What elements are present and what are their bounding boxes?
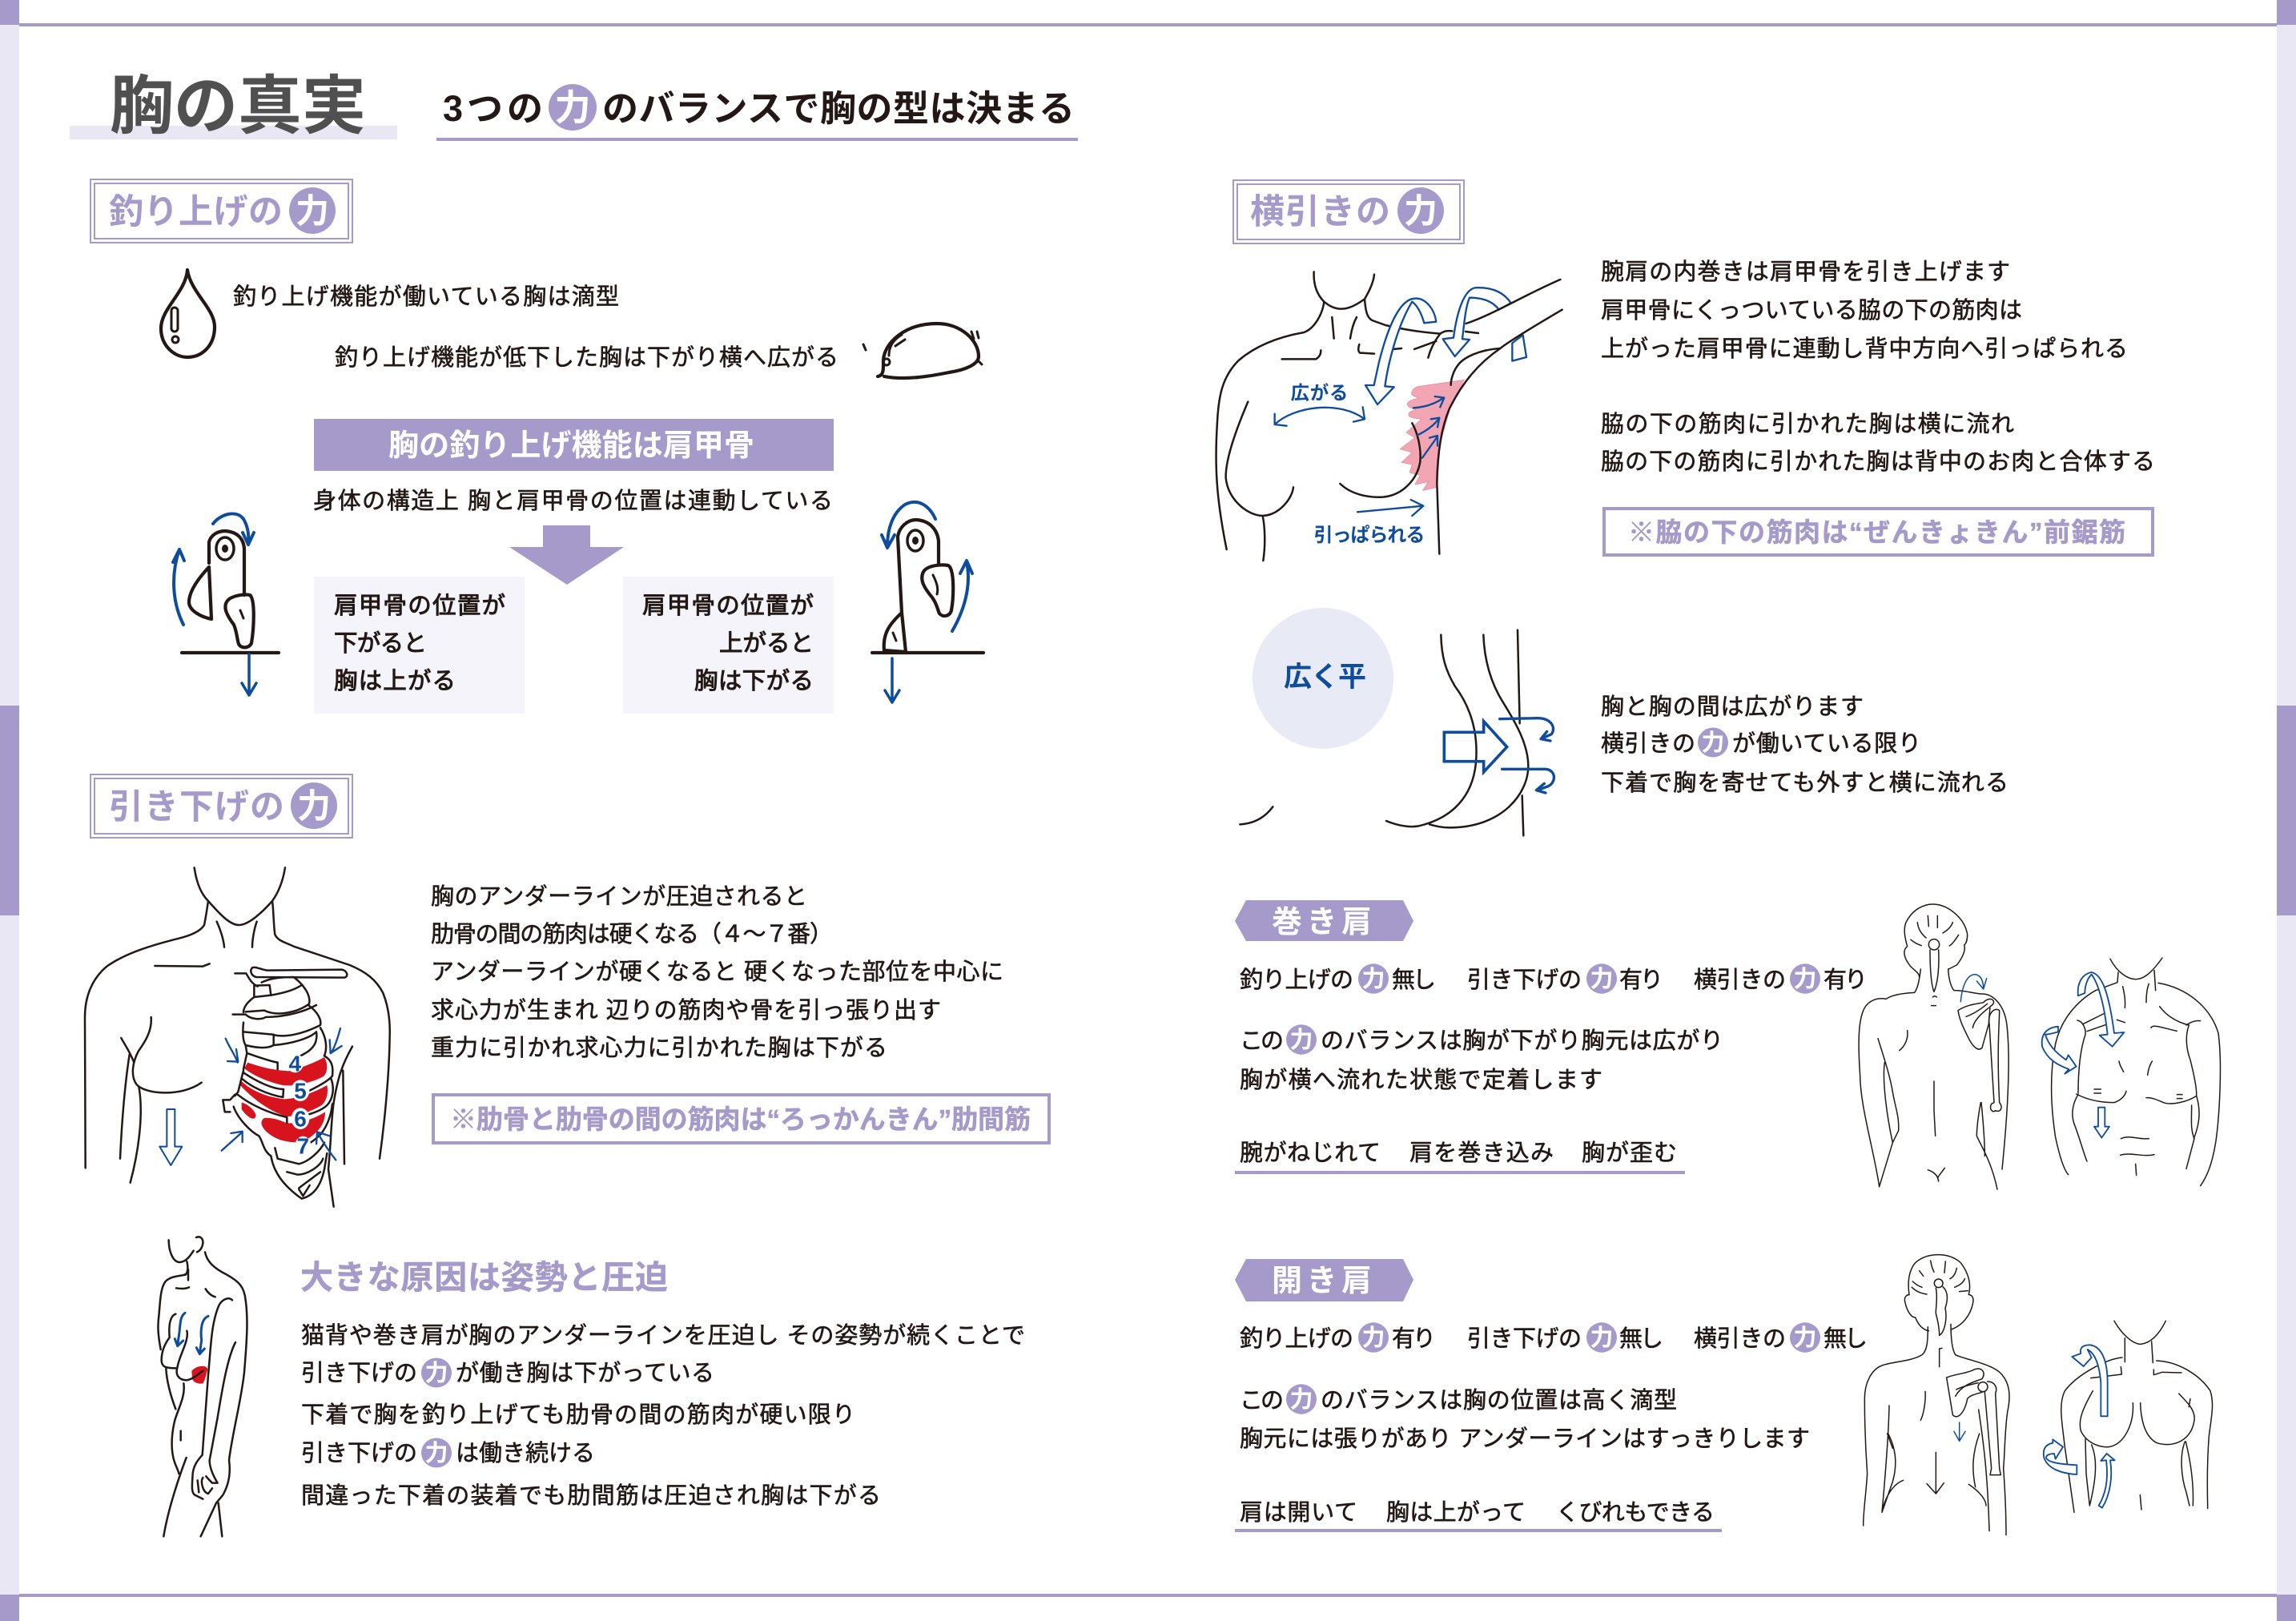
- text: shoulder rotation: 肩甲骨にくっついている脇の下の筋肉は: [1601, 297, 2022, 324]
- text: posture causes: が働き胸は下がっている: [456, 1360, 714, 1386]
- text: linked structure: 身体の構造上 胸と肩甲骨の位置は連動している: [313, 488, 833, 514]
- text: intercostal explanation: 求心力が生まれ 辺りの筋肉や骨を引っ張り出す: [431, 997, 941, 1024]
- badge: wide and flat: [1253, 608, 1393, 749]
- figure: chest with rib cage: 7: [297, 1134, 309, 1159]
- text: force balance: 力: [1361, 1325, 1385, 1351]
- subtitle: 力: [554, 87, 591, 128]
- text: lateral effect: 下着で胸を寄せても外すと横に流れる: [1601, 770, 2008, 796]
- text: shoulder rotation: 上がった肩甲骨に連動し背中方向へ引っぱられる: [1601, 336, 2128, 362]
- text: force balance: 横引きの: [1694, 967, 1786, 993]
- text: force balance: 力: [1590, 966, 1614, 992]
- text: effect: 力: [1289, 1027, 1313, 1053]
- text: lifting works: 釣り上げ機能が働いている胸は滴型: [233, 284, 619, 310]
- text: effect: 胸元には張りがあり アンダーラインはすっきりします: [1240, 1426, 1810, 1452]
- text: intercostal explanation: 胸のアンダーラインが圧迫されると: [431, 883, 807, 910]
- text: force balance: [1240, 963, 1868, 994]
- text: force balance: 釣り上げの: [1240, 1325, 1353, 1352]
- text: force balance: 有り: [1619, 967, 1663, 993]
- heading: pull-down force: 力: [297, 787, 331, 825]
- text: force balance: 引き下げの: [1467, 967, 1582, 993]
- text: summary with underline: [1235, 1499, 1722, 1532]
- text: force balance: [1240, 1322, 1868, 1353]
- text: force balance: 無し: [1619, 1325, 1663, 1352]
- text: effect: 力: [1289, 1386, 1313, 1413]
- figure: scapula raised: [872, 502, 983, 702]
- text: summary with underline: 胸が歪む: [1582, 1140, 1677, 1166]
- box: scapula down: 胸は上がる: [334, 668, 456, 694]
- text: force balance: 力: [1793, 1325, 1817, 1351]
- text: posture causes: 間違った下着の装着でも肋間筋は圧迫され胸は下がる: [301, 1482, 881, 1509]
- heading: main causes: 大きな原因は姿勢と圧迫: [300, 1259, 668, 1296]
- text: force balance: 力: [1590, 1325, 1614, 1351]
- text: posture causes: 猫背や巻き肩が胸のアンダーラインを圧迫し その姿勢が続くことで: [301, 1322, 1025, 1349]
- text: posture causes: 引き下げの: [301, 1361, 417, 1386]
- figure: chest with rib cage: 5: [294, 1078, 307, 1103]
- callout: intercostal note: [433, 1095, 1049, 1143]
- panel: open shoulders: [1235, 1255, 2213, 1535]
- text: shoulder rotation: [1601, 259, 2155, 475]
- text: effect: のバランスは胸が下がり胸元は広がり: [1321, 1028, 1723, 1054]
- text: posture causes: 力: [424, 1360, 448, 1386]
- text: force balance: 無し: [1824, 1325, 1868, 1352]
- text: effect: この: [1240, 1028, 1284, 1054]
- text: effect: この: [1240, 1388, 1284, 1414]
- badge: wide and flat: 広く平: [1284, 662, 1366, 693]
- figure: open shoulders front: [2044, 1321, 2213, 1512]
- heading: lateral force: [1233, 180, 1464, 243]
- text: posture causes: 下着で胸を釣り上げても肋骨の間の筋肉が硬い限り: [301, 1402, 855, 1428]
- text: force balance: 力: [1793, 966, 1817, 992]
- box: scapula down: 肩甲骨の位置が: [334, 593, 505, 619]
- box: scapula down: [314, 577, 525, 714]
- heading: pull-down force: [90, 774, 352, 838]
- heading: lifting force: [90, 179, 352, 243]
- text: lateral effect: [1601, 694, 2008, 796]
- heading: lifting force: 釣り上げの: [109, 193, 283, 231]
- text: force balance: 有り: [1824, 967, 1868, 993]
- text: summary with underline: くびれもできる: [1556, 1500, 1715, 1526]
- box: scapula up: 胸は下がる: [694, 668, 814, 694]
- page title: 胸の真実: [110, 70, 366, 142]
- figure: scapula lowered: [173, 513, 279, 695]
- figure: rolled shoulders front: [2042, 958, 2220, 1186]
- icon: flattened breast: [863, 324, 982, 378]
- figure: rolled shoulders back: [1859, 904, 2008, 1189]
- text: force balance: 引き下げの: [1467, 1326, 1582, 1352]
- text: intercostal explanation: [431, 883, 1003, 1061]
- text: force balance: 有り: [1392, 1325, 1436, 1352]
- figure: flowing breast: [1240, 630, 1554, 835]
- figure: chest with rib cage: [85, 867, 390, 1207]
- text: shoulder rotation: 腕肩の内巻きは肩甲骨を引き上げます: [1601, 259, 2010, 285]
- text: summary with underline: 肩は開いて: [1240, 1500, 1357, 1526]
- text: effect: のバランスは胸の位置は高く滴型: [1321, 1387, 1677, 1414]
- figure: open shoulders back: [1864, 1255, 2009, 1535]
- text: effect: [1240, 1384, 1810, 1452]
- text: intercostal explanation: 重力に引かれ求心力に引かれた胸は下がる: [431, 1035, 887, 1061]
- text: shoulder rotation: 脇の下の筋肉に引かれた胸は背中のお肉と合体する: [1601, 448, 2155, 475]
- box: scapula up: 肩甲骨の位置が: [642, 593, 814, 619]
- text: summary with underline: [1235, 1140, 1685, 1174]
- text: posture causes: 力: [424, 1440, 448, 1466]
- figure: serratus anterior: [1216, 272, 1562, 561]
- banner: scapula: 胸の釣り上げ機能は肩甲骨: [388, 429, 754, 463]
- figure: side body: [158, 1237, 247, 1536]
- label: open shoulders: 開き肩: [1272, 1265, 1372, 1298]
- label: rolled shoulders: [1235, 900, 1413, 941]
- text: lifting reduced: 釣り上げ機能が低下した胸は下がり横へ広がる: [335, 344, 838, 371]
- text: effect: 胸が横へ流れた状態で定着します: [1240, 1067, 1602, 1093]
- heading: lateral force: 横引きの: [1250, 193, 1390, 231]
- box: scapula up: 上がると: [719, 630, 814, 657]
- text: force balance: 無し: [1392, 967, 1436, 993]
- text: lateral effect: が働いている限り: [1732, 730, 1921, 757]
- box: scapula down: 下がると: [334, 630, 427, 657]
- callout: serratus note: ※脇の下の筋肉は“ぜんきょきん”前鋸筋: [1628, 517, 2125, 547]
- icon: teardrop breast: [161, 270, 215, 357]
- text: lateral effect: 横引きの: [1601, 730, 1695, 757]
- figure: serratus anterior: 引っぱられる: [1314, 525, 1425, 546]
- text: posture causes: は働き続ける: [456, 1440, 595, 1466]
- text: lateral effect: 力: [1701, 730, 1725, 756]
- text: intercostal explanation: 肋骨の間の筋肉は硬くなる（４～７番）: [431, 921, 833, 947]
- label: open shoulders: [1235, 1259, 1413, 1301]
- heading: pull-down force: 引き下げの: [109, 788, 284, 827]
- subtitle: のバランスで胸の型は決まる: [602, 88, 1075, 129]
- text: force balance: 釣り上げの: [1240, 967, 1353, 993]
- text: summary with underline: 肩を巻き込み: [1409, 1140, 1554, 1166]
- callout: serratus note: [1604, 509, 2153, 555]
- text: force balance: 横引きの: [1694, 1325, 1786, 1352]
- subtitle: 3つの: [443, 88, 543, 129]
- text: summary with underline: 腕がねじれて: [1240, 1140, 1381, 1166]
- figure: chest with rib cage: 6: [294, 1107, 307, 1132]
- banner: scapula: [314, 419, 834, 471]
- heading: lateral force: 力: [1404, 192, 1438, 230]
- heading: lifting force: 力: [296, 192, 329, 230]
- label: rolled shoulders: 巻き肩: [1272, 906, 1372, 939]
- figure: serratus anterior: 広がる: [1291, 382, 1348, 404]
- text: force balance: 力: [1361, 966, 1385, 992]
- text: summary with underline: 胸は上がって: [1386, 1499, 1526, 1526]
- text: posture causes: 引き下げの: [301, 1441, 417, 1466]
- arrow: down: [509, 525, 624, 585]
- panel: rolled shoulders: [1235, 900, 2220, 1189]
- text: lateral effect: 胸と胸の間は広がります: [1601, 694, 1864, 720]
- text: shoulder rotation: 脇の下の筋肉に引かれた胸は横に流れ: [1601, 411, 2014, 437]
- text: posture causes: [301, 1322, 1025, 1509]
- box: scapula up: [623, 577, 834, 714]
- text: effect: [1240, 1024, 1723, 1093]
- callout: intercostal note: ※肋骨と肋骨の間の筋肉は“ろっかんきん”肋間筋: [450, 1104, 1031, 1134]
- figure: chest with rib cage: 4: [289, 1051, 302, 1076]
- text: intercostal explanation: アンダーラインが硬くなると 硬くなった部位を中心に: [431, 959, 1003, 985]
- subtitle: [436, 84, 1078, 141]
